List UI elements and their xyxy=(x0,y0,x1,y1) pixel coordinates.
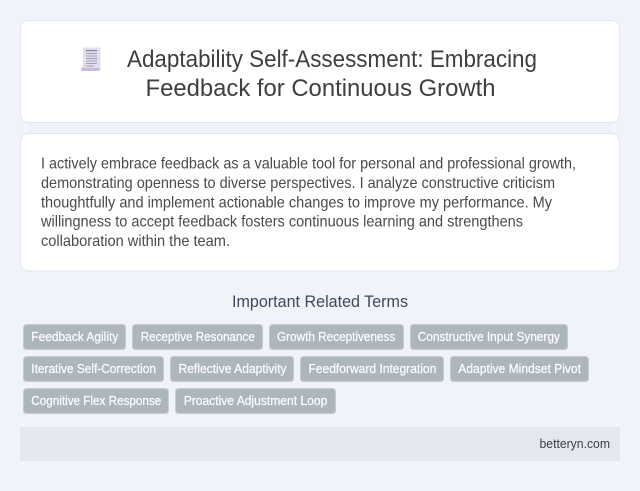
tag: reflective adaptivity xyxy=(170,356,294,382)
title text: Feedback for Continuous Growth xyxy=(146,75,496,102)
summary text: collaboration within the team. xyxy=(41,233,230,250)
panel: title card xyxy=(20,20,620,122)
tag: proactive adjustment loop: Proactive Adjustment Loop xyxy=(184,394,327,408)
tag: growth receptiveness xyxy=(270,324,404,350)
icon: document scroll xyxy=(81,48,100,71)
tag: iterative self-correction xyxy=(24,356,164,382)
tag: constructive input synergy xyxy=(410,324,568,350)
summary text: thoughtfully and implement actionable changes to improve my performance. My xyxy=(41,194,552,212)
tag: adaptive mindset pivot: Adaptive Mindset Pivot xyxy=(458,362,582,376)
tag: cognitive flex response xyxy=(24,388,168,414)
footer bar xyxy=(20,427,620,461)
panel: summary card xyxy=(20,134,620,271)
tag list xyxy=(24,324,588,414)
tag: feedforward integration xyxy=(300,356,444,382)
tag: iterative self-correction: Iterative Self-Correction xyxy=(31,362,156,376)
tag: constructive input synergy: Constructive Input Synergy xyxy=(418,330,561,344)
tag: feedforward integration: Feedforward Integration xyxy=(308,362,436,376)
tag: cognitive flex response: Cognitive Flex Response xyxy=(31,394,161,408)
summary text: willingness to accept feedback fosters continuous learning and strengthens xyxy=(40,214,523,231)
summary text: demonstrating openness to diverse perspectives. I analyze constructive criticism xyxy=(41,175,555,192)
footer source text: betteryn.com xyxy=(540,437,610,451)
tag: adaptive mindset pivot xyxy=(450,356,588,382)
tag: proactive adjustment loop xyxy=(176,388,336,414)
tag: receptive resonance xyxy=(132,324,262,350)
tag: receptive resonance: Receptive Resonance xyxy=(141,330,255,344)
heading: important related terms: Important Related Terms xyxy=(232,293,408,311)
tag: feedback agility: Feedback Agility xyxy=(31,330,119,344)
summary text: I actively embrace feedback as a valuable tool for personal and professional growth, xyxy=(41,156,576,173)
title text: Adaptability Self-Assessment: Embracing xyxy=(127,46,537,73)
tag: reflective adaptivity: Reflective Adaptivity xyxy=(178,362,287,376)
tag: feedback agility xyxy=(24,324,126,350)
tag: growth receptiveness: Growth Receptiveness xyxy=(277,330,395,344)
